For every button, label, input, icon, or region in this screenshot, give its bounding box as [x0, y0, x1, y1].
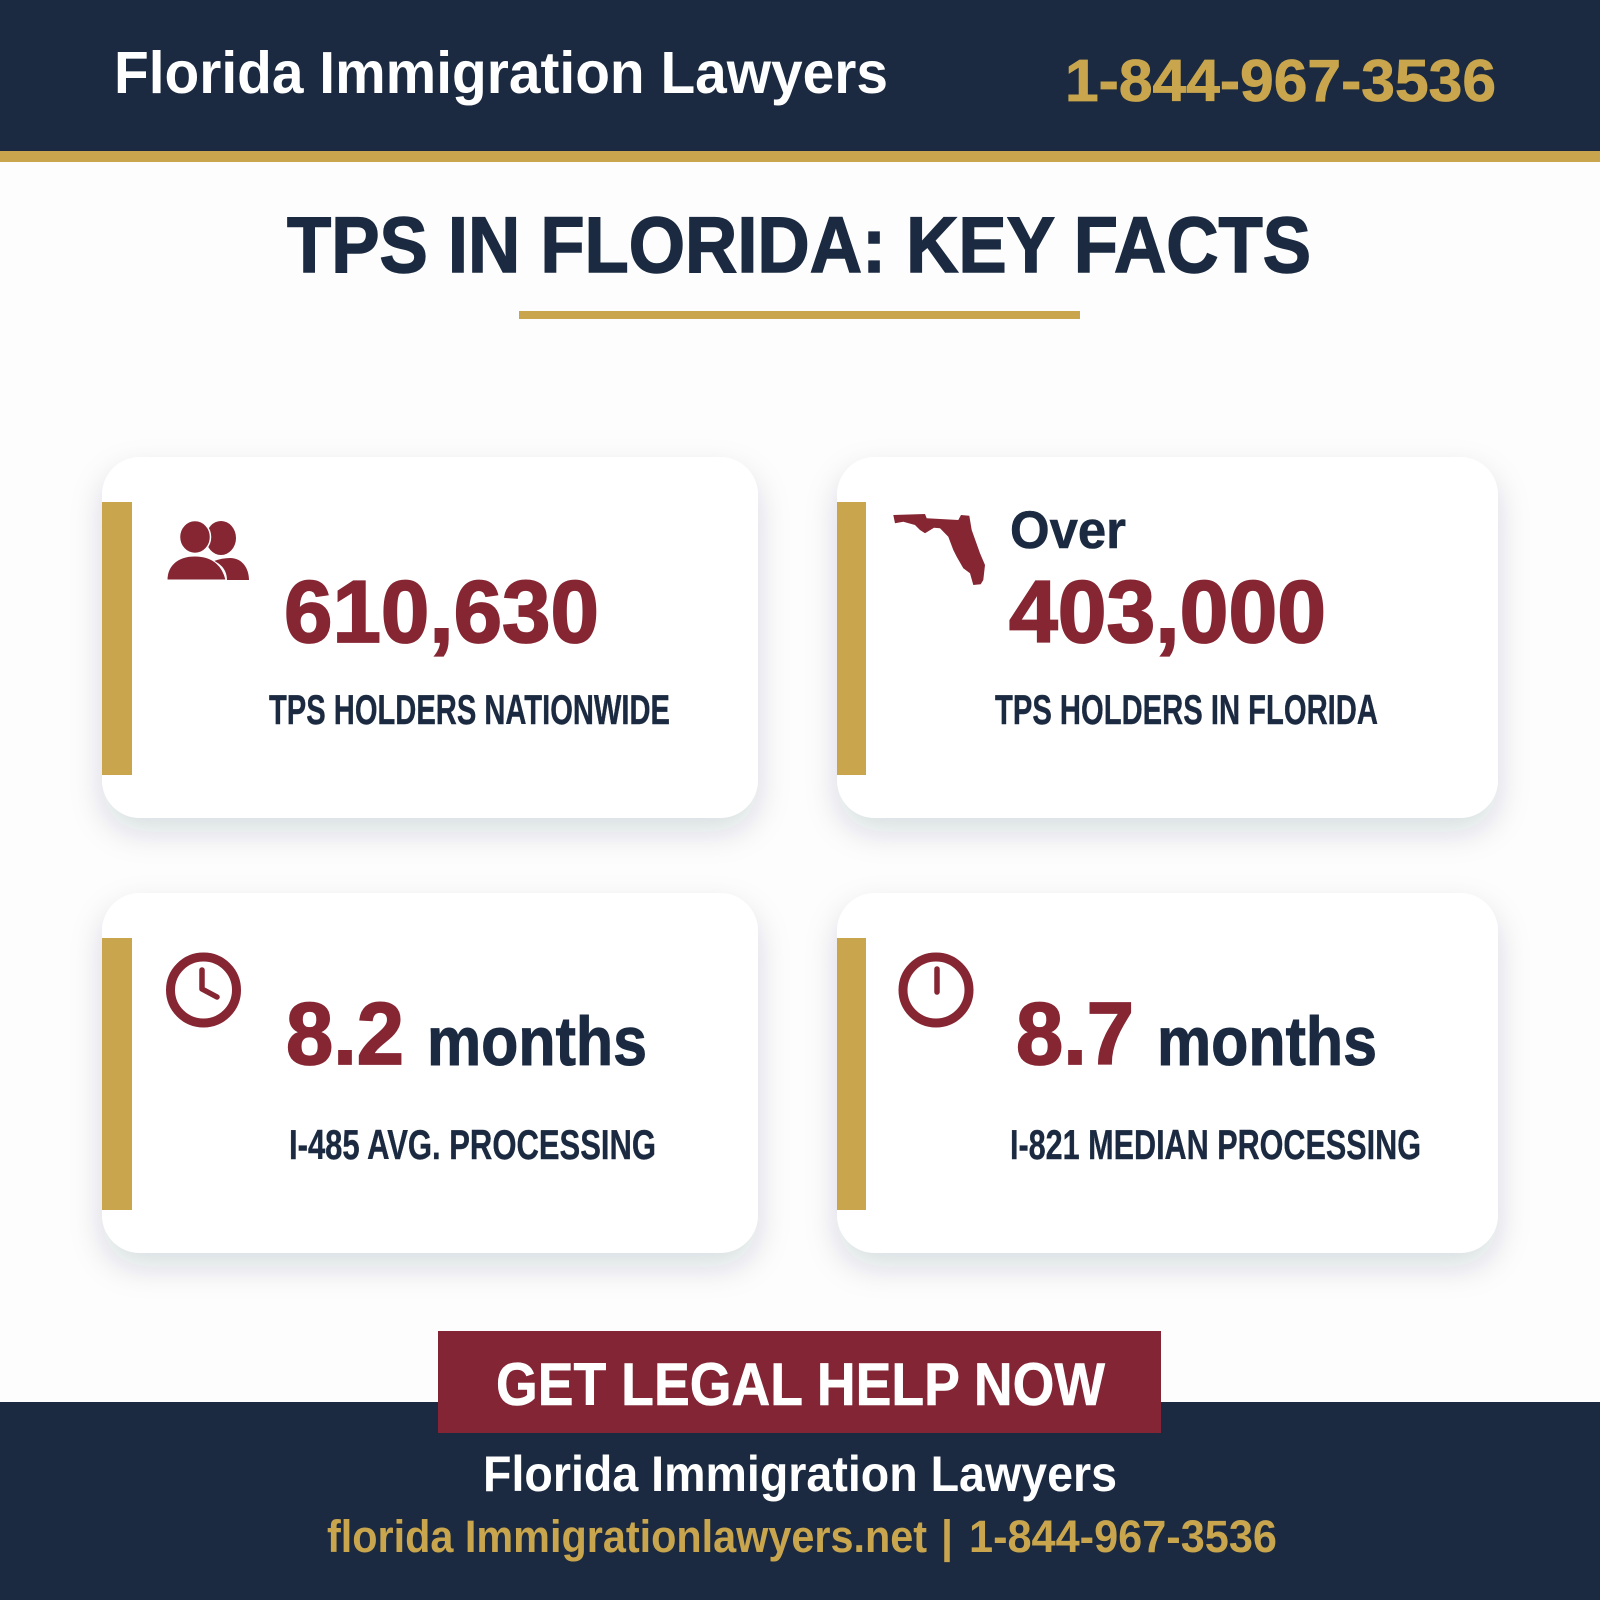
title [287, 200, 1311, 319]
panel: I-485 processing [102, 893, 758, 1253]
title: TPS IN FLORIDA: KEY FACTS [287, 200, 1311, 289]
label: I-821 median processing: I-821 MEDIAN PROCESSING [1010, 1121, 1421, 1168]
icon: Florida map [893, 514, 985, 585]
call to action button [438, 1331, 1161, 1433]
panel: TPS holders nationwide [102, 457, 758, 818]
label: TPS holders in Florida: TPS HOLDERS IN FLORIDA [995, 686, 1378, 733]
label: I-485 avg. processing: I-485 AVG. PROCESSING [289, 1121, 656, 1168]
icon: people [167, 520, 249, 580]
panel: I-821 processing [837, 893, 1498, 1253]
footer firm name: Florida Immigration Lawyers [483, 1446, 1117, 1502]
icon: stopwatch dial [903, 957, 969, 1023]
stat: 403,000: 403,000 [1009, 562, 1326, 661]
text: Over: Over [1010, 501, 1126, 560]
stat: 8.2 months [286, 984, 647, 1083]
header firm name: Florida Immigration Lawyers [114, 40, 888, 106]
footer bar [0, 1402, 1600, 1600]
label: TPS holders nationwide: TPS HOLDERS NATIONWIDE [269, 686, 670, 733]
stat: 610,630: 610,630 [284, 562, 599, 661]
call to action button: GET LEGAL HELP NOW [496, 1351, 1105, 1418]
stat: 8.7 months [1016, 984, 1377, 1083]
stat: 8.2 months: 8.2 [286, 984, 404, 1083]
stat: 8.7 months: months [1157, 1003, 1377, 1080]
panel: TPS holders in Florida [837, 457, 1498, 818]
header phone number: 1-844-967-3536 [1065, 48, 1496, 114]
footer website and phone: 1-844-967-3536 [969, 1511, 1277, 1562]
stat: 8.2 months: months [427, 1003, 647, 1080]
header bar [0, 0, 1600, 162]
footer website and phone: florida Immigrationlawyers.net [327, 1511, 927, 1562]
stat: 8.7 months: 8.7 [1016, 984, 1134, 1083]
footer website and phone: | [941, 1511, 953, 1563]
icon: clock [170, 957, 236, 1023]
footer website and phone [327, 1511, 1277, 1563]
